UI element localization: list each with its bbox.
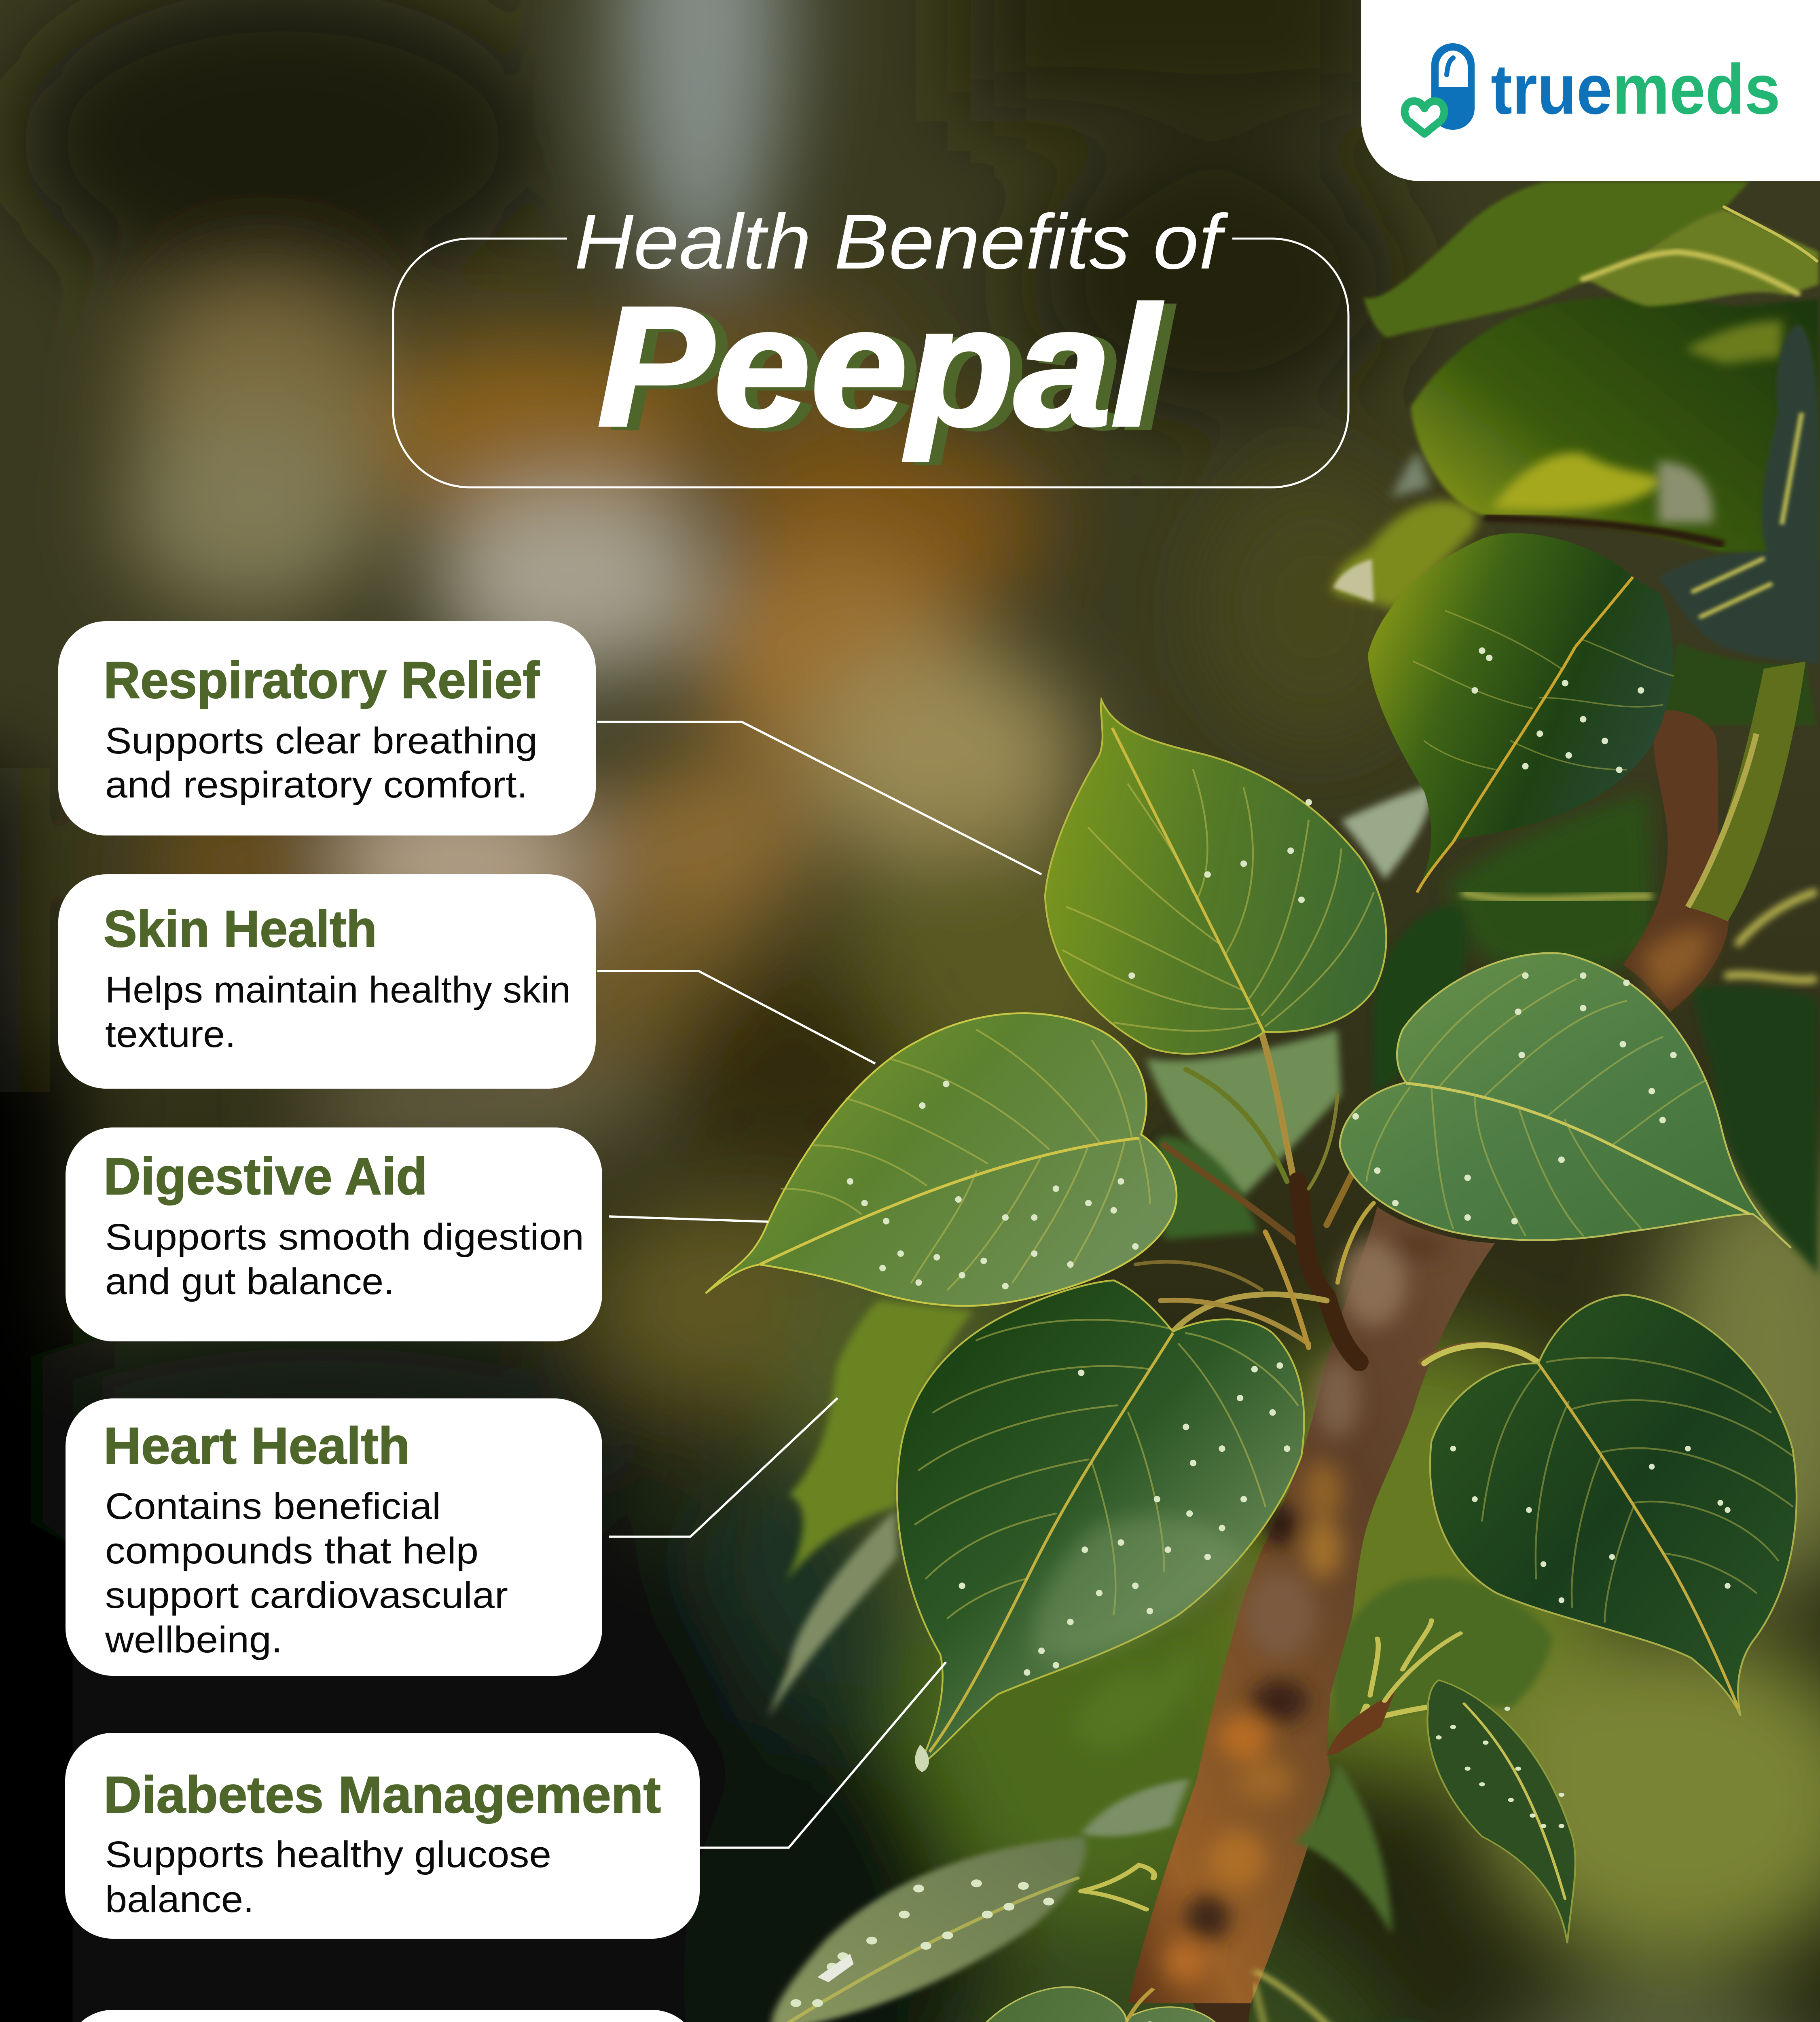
panel: Heart Health: Contains beneficial xyxy=(105,1486,441,1527)
leaf: Digestive and Skin pointer leaf xyxy=(706,1013,1177,1306)
callout lines xyxy=(597,722,1041,2022)
panel: Skin Health: Skin Health xyxy=(104,900,377,958)
icon: capsule and heart xyxy=(1405,43,1475,134)
panel: Skin Health xyxy=(58,874,596,1089)
panel: Skin Health: texture. xyxy=(105,1014,236,1055)
panel: Respiratory Relief: Supports clear breathing xyxy=(105,720,538,761)
twigs xyxy=(1135,1033,1536,1362)
panel: Diabetes Management: Supports healthy glucose xyxy=(105,1834,551,1875)
leaf: Respiratory pointer leaf xyxy=(1045,700,1386,1054)
title: Peepal: Peepal xyxy=(609,275,1175,465)
leaf: Female Reproductive pointer leaf xyxy=(922,1987,1227,2022)
panel: Female Reproductive Health xyxy=(65,2010,700,2022)
leaf: small bottom-right leaf and small leaf near trunk xyxy=(1427,1680,1575,1943)
panel: Digestive Aid xyxy=(66,1127,602,1341)
title: Health Benefits of: Health Benefits of xyxy=(574,198,1229,285)
leaf: top leaf F xyxy=(1368,533,1673,893)
lower background foliage xyxy=(768,662,1818,1752)
logo wordmark: truemeds xyxy=(1491,50,1780,129)
title: Peepal: Peepal xyxy=(597,272,1163,462)
leaf: lower dark leaves xyxy=(893,1972,1637,2022)
leaf: pale side leaf xyxy=(742,1620,1460,2022)
panel: Diabetes Management: balance. xyxy=(105,1879,254,1920)
panel: Skin Health: Helps maintain healthy skin xyxy=(105,969,571,1011)
main trunk xyxy=(1128,1207,1495,2022)
panel: Diabetes Management xyxy=(65,1733,700,1939)
panel: Heart Health: wellbeing. xyxy=(105,1619,282,1660)
leaf: right upper wet leaf xyxy=(1340,953,1791,1248)
logo panel xyxy=(1361,0,1820,181)
title frame xyxy=(393,239,1348,487)
panel: Heart Health xyxy=(66,1398,602,1676)
panel: Digestive Aid: and gut balance. xyxy=(105,1261,394,1302)
panel: Digestive Aid: Supports smooth digestion xyxy=(105,1216,584,1258)
panel: Respiratory Relief: Respiratory Relief xyxy=(104,651,540,709)
leaf: right lower dark leaf xyxy=(1424,1295,1797,1716)
panel: Respiratory Relief xyxy=(58,621,596,835)
peepal branch and leaves photo xyxy=(706,182,1819,2022)
panel: Heart Health: Heart Health xyxy=(104,1417,410,1475)
panel: Heart Health: compounds that help xyxy=(105,1530,478,1571)
panel: Heart Health: support cardiovascular xyxy=(105,1575,508,1616)
panel: Diabetes Management: Diabetes Management xyxy=(104,1766,661,1824)
panel: Digestive Aid: Digestive Aid xyxy=(104,1148,427,1206)
upper leaf cluster xyxy=(1331,182,1819,725)
leaf: Heart and Diabetes pointer leaf xyxy=(897,1280,1304,1772)
panel: Respiratory Relief: and respiratory comfort. xyxy=(105,764,528,806)
